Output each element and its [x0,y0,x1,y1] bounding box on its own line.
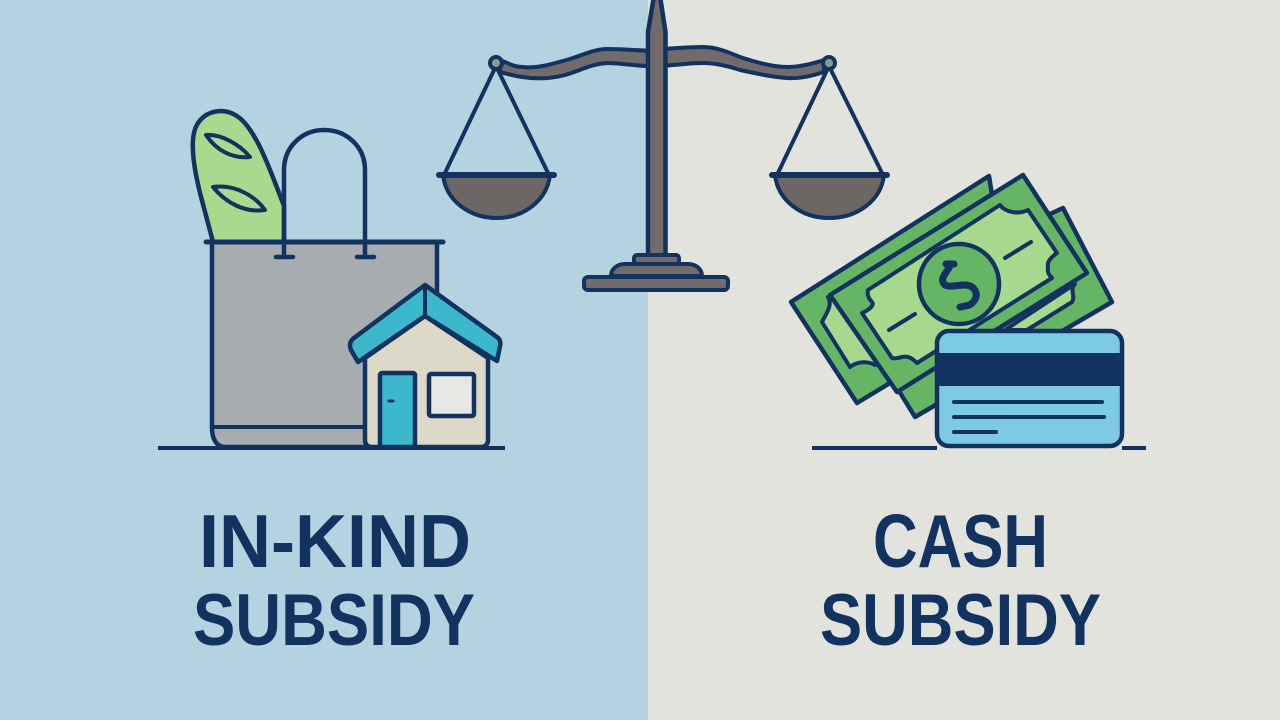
card text lines [954,402,1104,432]
bread [193,111,284,242]
heading line: subsidy: SUBSIDY [820,580,1101,661]
house roof [350,285,500,362]
bag rim [206,240,443,244]
back left banknote [791,176,1010,403]
scale beam [500,47,824,78]
panel: in-kind background [0,0,648,720]
bag bottom fold [213,425,370,429]
panel: cash background [648,0,1280,720]
house body [365,316,488,447]
dollar coin [919,244,999,324]
icon: credit card [937,331,1122,446]
bag body [212,242,437,447]
heading line: in-kind: IN-KIND [199,499,471,583]
scale base [584,255,728,290]
heading: cash subsidy [820,499,1101,661]
left pan [439,57,554,218]
icon: balance scale [439,0,887,290]
heading line: subsidy: SUBSIDY [193,580,475,661]
dollar sign [943,264,976,307]
bag handle [276,130,374,257]
house door [380,373,415,447]
banknote dash left [889,314,915,330]
heading: in-kind subsidy [193,499,475,661]
roof ridge [423,287,427,316]
door knob [389,400,393,402]
scale pillar [648,0,666,256]
icon: grocery bag with bread [193,111,443,447]
front banknote [830,175,1087,392]
ground line: cash [812,446,1146,450]
heading line: cash: CASH [873,499,1048,583]
icon: house [350,285,500,447]
right pan [772,57,887,218]
back right banknote [880,208,1112,417]
card magnetic stripe [937,353,1122,386]
ground line: in-kind [158,446,505,450]
banknote dash right [1005,242,1031,258]
house window [429,374,474,416]
icon: banknotes [791,175,1112,417]
